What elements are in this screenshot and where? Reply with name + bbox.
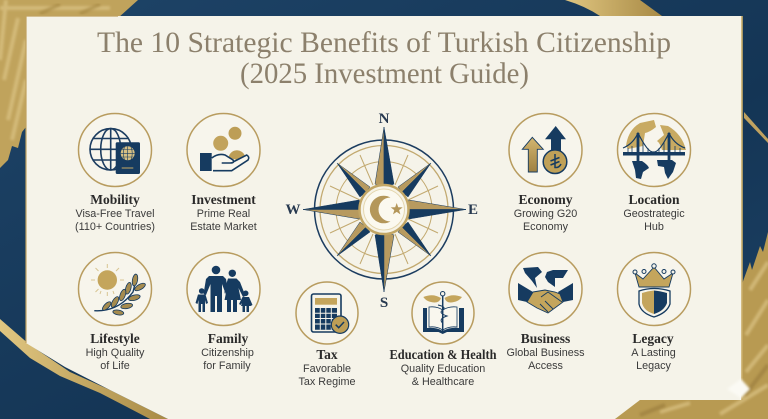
item: Education and Health: & Healthcare: [412, 376, 474, 388]
item: Family: Citizenship: [201, 347, 254, 359]
item: Family: Family: [208, 331, 248, 346]
item: Location: Location: [628, 192, 680, 207]
item: Mobility: [75, 114, 155, 233]
item: Economy: Economy: [523, 221, 569, 233]
item: Lifestyle: of Life: [100, 360, 130, 372]
item: Mobility: Visa-Free Travel: [75, 208, 155, 220]
item: Investment: Prime Real: [197, 208, 250, 220]
icon: crown and shield: [633, 264, 675, 317]
item: Mobility: Mobility: [90, 192, 140, 207]
title: The 10 Strategic Benefits of Turkish Citizenship: [97, 26, 671, 59]
item: Tax: [296, 282, 358, 388]
item: Lifestyle: High Quality: [86, 347, 145, 359]
item: Business: [506, 252, 585, 372]
item: Economy: [509, 114, 582, 233]
item: Investment: Estate Market: [190, 221, 257, 233]
icon: sun and olive branch: [91, 264, 146, 316]
item: Legacy: [618, 252, 690, 372]
compass letters: N: [379, 111, 390, 127]
icon: world map and handshake: [518, 267, 573, 313]
item: Business: Global Business: [506, 347, 585, 359]
item: Investment: Investment: [191, 192, 256, 207]
item: Lifestyle: Lifestyle: [90, 331, 140, 346]
item: Economy: Growing G20: [514, 208, 577, 220]
compass diagonal points: [337, 163, 431, 256]
item: Legacy: Legacy: [632, 331, 674, 346]
item: Tax: Tax Regime: [298, 376, 356, 388]
item: Business: Access: [528, 360, 563, 372]
item: Investment: [187, 114, 260, 233]
item: Mobility: (110+ Countries): [75, 221, 155, 233]
compass letters: W: [286, 202, 300, 218]
icon: hand with coins: [200, 127, 249, 171]
title: [97, 26, 671, 90]
item: Lifestyle: [78, 252, 152, 372]
compass rose: [303, 127, 466, 292]
item: Tax: Tax: [316, 347, 338, 362]
compass letters: E: [468, 202, 478, 218]
compass centre: crescent and star: [360, 185, 408, 234]
item: Location: Hub: [644, 221, 664, 233]
icon: bridge and globe: [623, 120, 686, 179]
item: Location: Geostrategic: [623, 208, 685, 220]
icon: globe and passport: [90, 129, 140, 174]
compass letters: [286, 111, 478, 311]
item: Education and Health: [390, 282, 497, 388]
item: Legacy: A Lasting: [631, 347, 676, 359]
compass cardinal points: [303, 127, 466, 292]
item: Family: for Family: [203, 360, 251, 372]
item: Legacy: Legacy: [636, 360, 672, 372]
item: Business: Business: [521, 331, 570, 346]
title: (2025 Investment Guide): [240, 57, 529, 90]
icon: calculator with check: [312, 294, 349, 333]
sparkle decoration: [727, 379, 750, 398]
compass letters: S: [380, 295, 388, 311]
icon: book and caduceus: [423, 292, 464, 334]
item: Education and Health: Education & Health: [390, 347, 497, 362]
item: Tax: Favorable: [303, 363, 351, 375]
icon: family silhouette: [196, 266, 252, 312]
item: Education and Health: Quality Education: [401, 363, 485, 375]
icon: rising arrows and lira coin: [522, 126, 567, 174]
item: Family: [187, 252, 260, 372]
item: Economy: Economy: [518, 192, 573, 207]
item: Location: [618, 114, 690, 233]
